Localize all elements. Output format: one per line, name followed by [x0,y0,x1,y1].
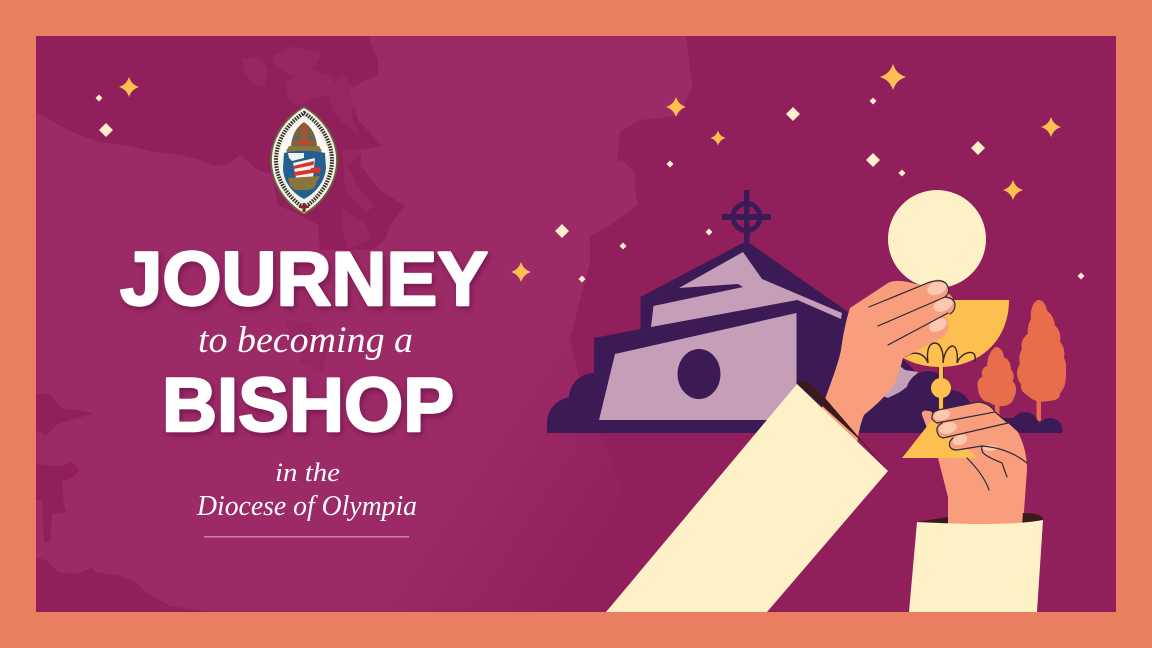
seal of the diocese [271,107,337,214]
tree: small [978,348,1015,422]
bushes [888,371,1062,433]
gold stars [119,64,1061,282]
church [547,190,930,449]
subtitle: to becoming a: to becoming a [198,320,413,361]
church lower wall [599,313,796,420]
left hand [821,278,955,445]
chalice flower [905,343,975,363]
chalice cup [871,300,1009,367]
chalice stem [938,365,944,415]
chalice knob [931,378,951,398]
church silhouette [547,190,930,449]
tree: large [1018,301,1065,420]
palm [938,402,1027,525]
right hand [902,402,1027,525]
text: in the: in the [275,458,340,487]
hand lines [932,402,1027,490]
church side detail [880,362,918,398]
text: Diocese of Olympia: Diocese of Olympia [196,491,417,522]
trees [978,301,1065,422]
church window [678,349,720,399]
title: BISHOP: BISHOP [162,363,454,448]
cream diamonds [96,94,1084,282]
wafer [888,190,986,288]
paten [902,420,978,458]
finger outlines [869,281,955,345]
left sleeve [606,380,888,612]
thumb [922,411,938,436]
fingers [932,402,1010,450]
right sleeve [909,500,1043,612]
stars [96,64,1084,282]
fingernails [925,278,949,298]
fingernails [932,408,952,422]
chalice [871,300,1009,415]
church upper wall [651,252,842,327]
title: JOURNEY: JOURNEY [120,237,488,322]
underline rule [204,536,409,538]
